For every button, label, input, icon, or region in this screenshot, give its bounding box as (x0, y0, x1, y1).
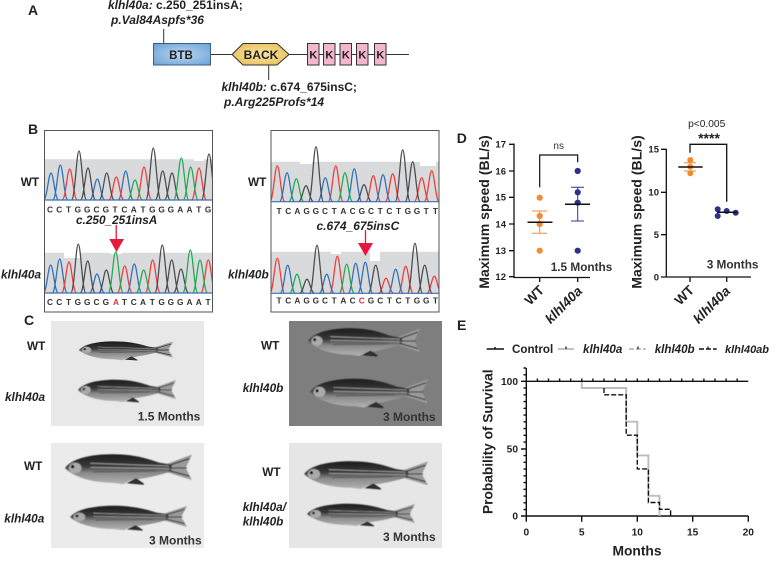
age label: 1.5 Months (551, 260, 613, 274)
x labels: klhl40a (542, 283, 585, 326)
klhl40a mutation label (108, 0, 243, 27)
panel C: fish photographs (4, 312, 442, 548)
genotype labels: klhl40a (4, 512, 45, 526)
BACK domain: BACK (244, 48, 279, 62)
y tick labels: 12 (495, 272, 506, 283)
genotype labels: klhl40a/ (243, 500, 288, 514)
significance bracket: ns (553, 141, 564, 152)
y tick labels: 0 (654, 272, 659, 283)
BTB domain (154, 44, 210, 65)
y tick labels: 100 (501, 377, 518, 388)
genotype labels: klhl40b (243, 514, 283, 528)
WT data (528, 195, 552, 254)
axes (661, 149, 751, 282)
klhl40a sequence: CCTGGCG (47, 297, 109, 307)
legend: Control (512, 343, 553, 356)
klhl40b label: klhl40b (228, 268, 269, 282)
photo: klhl40b 3 months: 3 Months (383, 410, 436, 424)
panel A: gene domain diagram (28, 0, 409, 109)
legend (487, 343, 769, 356)
significance bracket (540, 141, 578, 187)
Kelch repeats (308, 44, 386, 65)
photo: klhl40b 3 months (289, 321, 442, 426)
WT chromatogram (270, 147, 439, 202)
klhl40a sequence: TCATGGGAAT (122, 297, 211, 307)
arrow: insertion site (358, 230, 373, 256)
x tick labels: 10 (632, 528, 643, 538)
survival axes (521, 368, 748, 522)
x tick labels: 15 (687, 528, 699, 538)
Kelch repeats: K (358, 50, 366, 62)
Kelch repeats: K (309, 50, 317, 62)
panel D: left speed chart 1.5 months (457, 130, 613, 326)
klhl40b mutation label (222, 80, 357, 109)
WT chromatogram (44, 148, 216, 200)
klhl40a data (565, 168, 590, 254)
x labels: WT (672, 282, 698, 308)
y axis title: Maximum speed (BL/s) (628, 135, 644, 289)
x labels (672, 282, 733, 326)
axis titles: Months (612, 544, 662, 558)
insertion label: c.674_675insC (316, 219, 400, 233)
arrow: insertion site (109, 225, 124, 252)
control survival curve (526, 378, 748, 381)
WT data (678, 157, 703, 176)
axis titles (480, 369, 662, 558)
panel letter B: B (28, 121, 38, 137)
klhl40b sequence: GCTCTGGT (368, 296, 438, 306)
y tick labels (501, 377, 518, 523)
axes (509, 144, 590, 282)
genotype labels: klhl40b (243, 381, 283, 395)
y tick labels: 13 (495, 246, 506, 257)
WT sequence: CCTGGCGTCATGGGAATG (47, 204, 211, 214)
frame (271, 130, 439, 312)
x labels (522, 282, 585, 326)
panel D: right speed chart 3 months (628, 119, 759, 326)
legend: klhl40ab (725, 344, 769, 356)
klhl40a chromatogram (43, 244, 216, 293)
klhl40a survival curve (582, 381, 660, 516)
Kelch repeats: K (325, 50, 333, 62)
klhl40b and klhl40ab survival curves (604, 388, 671, 516)
y tick labels: 5 (654, 230, 660, 241)
klhl40a data (715, 206, 739, 219)
photo: klhl40a 1.5 months: 1.5 Months (138, 410, 201, 424)
Kelch repeats: K (376, 50, 384, 62)
y tick labels (648, 145, 660, 283)
y tick labels: 17 (495, 140, 506, 151)
klhl40a sequence: A (113, 297, 119, 307)
panel letter A: A (28, 2, 38, 18)
klhl40b sequence: C (359, 296, 365, 306)
WT label: WT (248, 175, 267, 189)
y tick labels: 0 (512, 512, 518, 523)
x tick labels: 5 (579, 528, 585, 538)
x labels: klhl40a (690, 283, 733, 326)
y tick labels: 15 (495, 193, 507, 204)
photo: double mutant 3 months (289, 443, 442, 548)
y tick labels: 16 (495, 166, 506, 177)
photo: klhl40a 3 months (51, 443, 204, 548)
panel letter D: D (457, 130, 467, 146)
klhl40b mutation label: p.Arg225Profs*14 (223, 95, 324, 109)
klhl40a mutation label: p.Val84Aspfs*36 (110, 13, 204, 27)
photo: klhl40a 1.5 months (51, 321, 204, 426)
y tick labels (495, 140, 507, 283)
y tick labels: 10 (648, 188, 659, 199)
significance bracket (688, 119, 727, 202)
significance bracket: **** (698, 130, 720, 146)
genotype labels (4, 338, 288, 528)
panel B: left chromatograms (1, 121, 216, 312)
photo: double mutant 3 months: 3 Months (383, 530, 436, 544)
photo: klhl40a 3 months: 3 Months (149, 534, 202, 548)
genotype labels: klhl40a (5, 390, 45, 404)
genotype labels: WT (261, 338, 280, 352)
BTB domain: BTB (169, 50, 193, 62)
insertion label: c.250_251insA (76, 213, 157, 227)
frame (44, 130, 212, 312)
panel E: survival chart (457, 317, 769, 558)
legend: klhl40b (655, 343, 695, 356)
significance bracket: p<0.005 (688, 119, 726, 130)
protein backbone line (164, 29, 409, 80)
y tick labels: 15 (648, 145, 660, 156)
genotype labels: WT (27, 339, 46, 353)
panel B: right chromatograms (228, 130, 442, 312)
klhl40b mutation label: klhl40b: c.674_675insC; (222, 80, 357, 94)
y tick labels: 14 (495, 219, 507, 230)
axis titles: Probability of Survival (480, 369, 496, 514)
panel letter E: E (457, 317, 466, 333)
genotype labels: WT (24, 459, 43, 473)
BACK domain (232, 44, 289, 65)
WT sequence: TCAGGCTACGCTCTGGTT (276, 206, 438, 216)
x tick labels: 20 (743, 528, 754, 538)
klhl40a label: klhl40a (1, 268, 41, 282)
panel letter C: C (24, 312, 34, 328)
genotype labels: WT (262, 465, 281, 479)
klhl40b sequence: TCAGGCTAC (276, 296, 356, 306)
age label: 3 Months (707, 258, 759, 272)
WT label: WT (21, 175, 40, 189)
legend: klhl40a (583, 343, 623, 356)
x labels: WT (522, 282, 548, 308)
x tick labels: 0 (523, 528, 529, 538)
x tick labels (523, 528, 754, 538)
Kelch repeats: K (342, 50, 350, 62)
y tick labels: 50 (507, 445, 518, 456)
y axis title: Maximum speed (BL/s) (476, 135, 492, 289)
klhl40b chromatogram (270, 243, 442, 293)
